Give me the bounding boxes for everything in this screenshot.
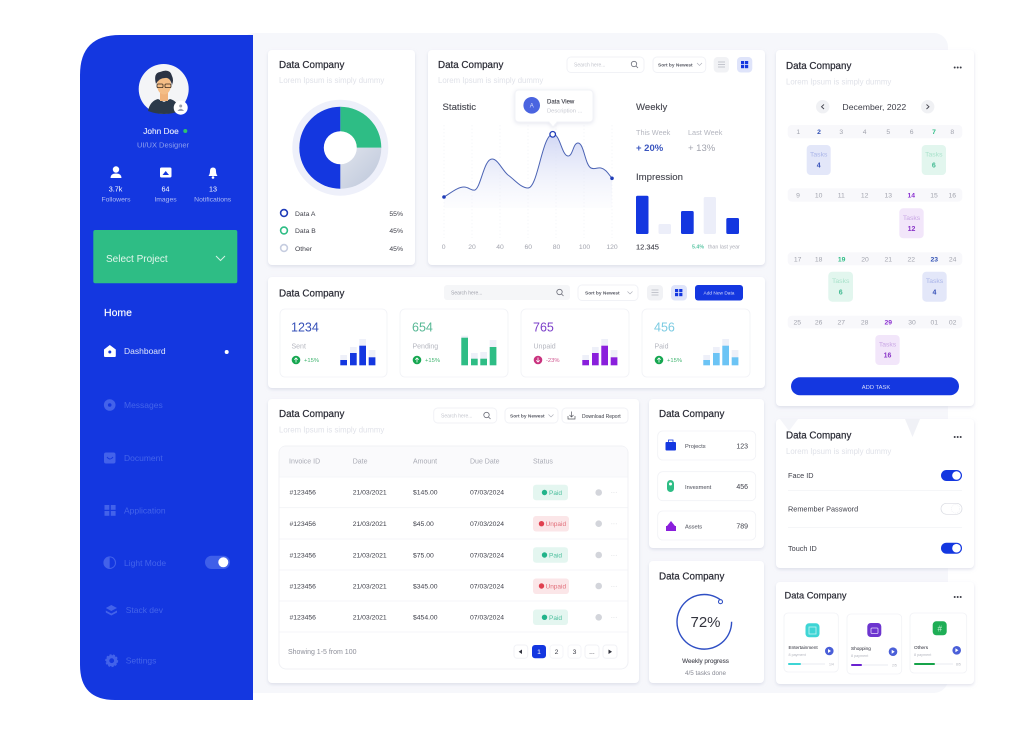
table header	[289, 458, 553, 466]
stat card: paid	[642, 309, 750, 377]
nav item: settings: Settings	[126, 656, 156, 666]
legend	[281, 210, 403, 253]
week 2: 14	[908, 192, 915, 199]
panel: weekly progress	[649, 561, 764, 683]
week 3: 18	[815, 256, 823, 263]
category: others	[910, 613, 967, 673]
search box: Search here...	[441, 414, 472, 420]
stat card: paid: +15%	[667, 358, 682, 364]
week 2: 12	[861, 192, 869, 199]
table header: Status	[533, 458, 553, 466]
tooltip: data view: Description ...	[547, 108, 583, 114]
week 1	[788, 125, 962, 138]
row 5	[290, 610, 617, 625]
stat card: paid: Paid	[654, 344, 669, 350]
main background panel	[240, 33, 948, 693]
task: blue 4: Tasks	[926, 278, 944, 285]
week 2: 16	[949, 192, 956, 199]
row 5: 07/03/2024	[470, 614, 504, 622]
week 3: 23	[931, 256, 938, 263]
week 1: 8	[950, 129, 954, 136]
heading: Data Company	[279, 409, 344, 420]
subtitle: Lorem Ipsum is simply dummy	[786, 447, 891, 456]
sort dropdown	[653, 57, 706, 72]
task: blue 4: 4	[933, 290, 937, 296]
investment row	[658, 472, 756, 501]
search box	[567, 57, 644, 72]
legend: 45%	[389, 246, 403, 253]
row 5: $454.00	[413, 614, 438, 622]
stat card: sent: Sent	[292, 344, 306, 350]
table footer text: Showing 1-5 from 100	[288, 649, 357, 656]
legend: Data B	[295, 228, 316, 235]
category: entertainment: 8 payment	[788, 653, 806, 657]
row 5: Paid	[549, 615, 562, 622]
task: green 6: 6	[839, 290, 843, 296]
line chart: 60	[525, 244, 532, 251]
impression change: than last year	[708, 244, 740, 250]
donut chart	[292, 100, 388, 196]
row 4: 07/03/2024	[470, 584, 504, 590]
line chart: 80	[553, 244, 560, 251]
statistic heading: Statistic	[442, 102, 476, 113]
bars: sent	[340, 339, 375, 365]
grid view button	[737, 57, 752, 72]
stat card: unpaid: 765	[533, 320, 554, 334]
stat: images: 64	[162, 184, 170, 194]
week 2: 15	[930, 192, 938, 199]
row 3: ···	[611, 552, 617, 559]
add new data button: Add New Data	[704, 290, 735, 296]
month navigation: December, 2022	[842, 102, 906, 112]
impression bar chart	[636, 196, 739, 234]
impression change	[692, 244, 740, 250]
heading: Data Company	[786, 61, 851, 72]
bars: pending	[461, 336, 496, 365]
panel: statistic	[428, 50, 765, 265]
legend: 55%	[389, 211, 403, 218]
task: purple 16: Tasks	[879, 342, 897, 348]
assets row	[658, 511, 756, 540]
row 4: ···	[611, 583, 617, 590]
panel: calendar	[776, 50, 974, 406]
week 3: 19	[838, 256, 846, 263]
list view button	[647, 285, 663, 300]
progress ring: 72%	[690, 614, 721, 631]
line chart: 40	[496, 244, 504, 251]
row 1	[290, 485, 617, 500]
week 1: 2	[817, 129, 821, 136]
week 3: 20	[861, 256, 869, 263]
row 3	[290, 547, 617, 563]
week 3: 22	[908, 256, 915, 263]
subtitle: Lorem Ipsum is simply dummy	[786, 78, 891, 86]
category: entertainment: Entertainment	[788, 645, 818, 650]
stat card: unpaid: -23%	[546, 358, 560, 364]
profile role: UI/UX Designer	[137, 140, 190, 150]
add task button	[791, 377, 959, 395]
row 4: $345.00	[413, 584, 438, 590]
table header: Due Date	[470, 458, 500, 466]
category: shopping	[847, 614, 902, 674]
notch shape right	[905, 419, 920, 437]
row 5: 21/03/2021	[353, 614, 387, 622]
progress caption: Weekly progress	[682, 658, 729, 665]
row 2: $45.00	[413, 521, 434, 528]
nav item: application	[104, 505, 166, 516]
row 2: 07/03/2024	[470, 521, 504, 528]
more menu	[954, 596, 962, 598]
panel: summary stats	[268, 277, 765, 388]
stat card: pending: 654	[412, 320, 433, 334]
legend: 45%	[389, 228, 403, 235]
nav item: stack dev: Stack dev	[126, 605, 164, 615]
sidebar	[80, 35, 253, 700]
heading: Data Company	[279, 60, 344, 71]
pagination: 3	[573, 649, 577, 656]
pagination: 2	[555, 649, 559, 656]
online status dot	[183, 129, 187, 133]
notch shape left	[780, 419, 798, 431]
task: green 6: Tasks	[832, 278, 850, 285]
week 4: 01	[931, 320, 938, 327]
stat card: sent: 1234	[291, 320, 319, 334]
row 4	[290, 578, 617, 594]
week 4: 25	[794, 320, 801, 327]
task: purple 12	[899, 208, 924, 238]
row 1: 21/03/2021	[353, 490, 387, 496]
stat card: pending	[400, 309, 508, 377]
week 2	[788, 188, 962, 202]
more menu	[954, 66, 962, 68]
nav item: document	[104, 452, 163, 464]
investment row: 456	[736, 484, 748, 491]
bars: paid	[703, 339, 738, 365]
row 2: #123456	[290, 521, 316, 528]
nav item: dashboard: Dashboard	[124, 346, 166, 356]
task: purple 16: 16	[884, 353, 891, 360]
row 3: Paid	[549, 552, 562, 560]
select project button	[93, 230, 237, 283]
week 4: 28	[861, 320, 869, 327]
task: blue 4: 4	[817, 162, 821, 170]
stat card: sent: +15%	[304, 358, 319, 364]
heading: Data Company	[786, 430, 851, 442]
investment row: Invesment	[685, 485, 712, 491]
week 2: 10	[815, 192, 823, 199]
task: purple 12: Tasks	[903, 215, 921, 222]
tooltip: data view	[515, 90, 593, 127]
line chart: 0	[442, 244, 446, 251]
download report button	[562, 408, 628, 423]
impression heading: Impression	[636, 172, 683, 183]
select project button: Select Project	[106, 254, 168, 265]
row 3: 21/03/2021	[353, 552, 387, 560]
week 1: 7	[932, 129, 936, 136]
week 3: 17	[794, 256, 802, 263]
add task button: ADD TASK	[862, 385, 890, 391]
sort dropdown: Sort by Newest	[585, 290, 620, 296]
panel: payment categories	[776, 582, 974, 684]
nav heading: Home	[104, 307, 132, 319]
week 4	[788, 316, 962, 328]
pagination: 1	[537, 649, 541, 656]
row 4: Unpaid	[546, 584, 566, 590]
legend: Data A	[295, 211, 316, 218]
nav item: settings	[106, 655, 156, 666]
week 4: 26	[815, 320, 823, 327]
task: purple 16	[875, 335, 900, 365]
week 1: 5	[886, 129, 890, 136]
week 2: 13	[885, 192, 892, 199]
row 4: 21/03/2021	[353, 584, 387, 590]
category: shopping: 2/5	[892, 664, 897, 668]
line chart: 120	[606, 244, 618, 251]
task: blue 4	[922, 272, 947, 302]
row 1: Paid	[549, 490, 562, 497]
weekly comparison: + 13%	[688, 143, 716, 154]
row 1: #123456	[290, 490, 316, 496]
task: green 6	[828, 272, 853, 302]
heading: Data Company	[438, 60, 503, 71]
invoice table	[279, 446, 628, 669]
stat card: sent	[280, 309, 387, 377]
stat card: unpaid: Unpaid	[534, 344, 556, 350]
line chart: 20	[468, 244, 476, 251]
heading: Data Company	[279, 288, 344, 300]
category: entertainment	[784, 613, 838, 672]
week 3: 24	[949, 256, 957, 263]
week 1: 6	[910, 129, 914, 136]
row 2	[290, 516, 617, 532]
list view button	[714, 57, 729, 72]
task: purple 12: 12	[908, 226, 915, 233]
row 5: ···	[611, 614, 617, 621]
table header: Date	[353, 458, 368, 466]
nav item: messages: Messages	[124, 400, 163, 410]
nav item: stack dev	[106, 605, 164, 616]
week 1: 3	[839, 129, 843, 136]
tooltip: data view: A	[530, 104, 534, 110]
search box: Search here...	[451, 290, 482, 296]
profile avatar	[139, 64, 189, 115]
nav item: light mode	[104, 556, 230, 569]
pagination: ...	[589, 649, 595, 656]
nav item: messages	[104, 399, 163, 411]
task: green 6: 6	[932, 162, 936, 170]
row 2: ···	[611, 520, 617, 528]
line chart	[442, 125, 618, 251]
month navigation	[816, 100, 934, 113]
stat card: paid: 456	[654, 320, 675, 334]
setting: face id: Face ID	[788, 471, 814, 480]
heading: Data Company	[784, 590, 847, 600]
task: blue 4: Tasks	[810, 152, 828, 158]
row 2: 21/03/2021	[353, 521, 387, 528]
impression change: 5.4%	[692, 244, 704, 250]
search box	[444, 285, 570, 300]
panel: donut chart	[268, 50, 415, 265]
line chart: 100	[579, 244, 590, 251]
row 1: 07/03/2024	[470, 490, 504, 496]
stat: notifications: 13	[209, 184, 217, 194]
pagination	[514, 645, 617, 658]
nav item: document: Document	[124, 453, 163, 463]
subtitle: Lorem Ipsum is simply dummy	[279, 426, 384, 434]
more menu	[954, 436, 962, 438]
category: others: Others	[914, 645, 929, 650]
heading: Data Company	[659, 572, 724, 582]
setting: remember password: Remember Password	[788, 504, 858, 514]
add new data button	[695, 285, 743, 300]
weekly heading: Weekly	[636, 102, 667, 113]
heading: Data Company	[659, 409, 724, 420]
week 4: 02	[949, 320, 957, 327]
category: others: 8 payment	[914, 653, 931, 657]
search box: Search here...	[574, 62, 605, 68]
grid view button	[671, 285, 687, 300]
nav item: application: Application	[124, 506, 166, 516]
week 3	[788, 252, 962, 265]
sort dropdown: Sort by Newest	[510, 414, 545, 420]
week 3: 21	[885, 256, 892, 263]
sort dropdown: Sort by Newest	[658, 62, 693, 68]
task: green 6	[922, 145, 946, 175]
row 3: #123456	[290, 552, 316, 560]
week 4: 27	[838, 320, 845, 327]
stat: images	[154, 168, 177, 204]
setting: remember password	[788, 503, 962, 514]
setting: touch id	[788, 543, 962, 554]
download report button: Download Report	[582, 414, 621, 420]
panel: invoice table	[268, 399, 639, 683]
subtitle: Lorem Ipsum is simply dummy	[438, 76, 543, 85]
impression total: 12.345	[636, 242, 659, 252]
table header: Amount	[413, 458, 437, 466]
stat: notifications	[194, 168, 232, 204]
task: blue 4	[807, 145, 831, 175]
legend: Other	[295, 246, 313, 253]
row 4: #123456	[290, 584, 316, 590]
stat: followers: Followers	[101, 196, 131, 204]
week 2: 11	[838, 192, 845, 199]
panel: counters	[649, 399, 764, 548]
nav item: light mode: Light Mode	[124, 558, 166, 568]
sort dropdown	[505, 408, 558, 423]
progress detail: 4/5 tasks done	[685, 670, 726, 677]
nav item: dashboard	[104, 345, 229, 357]
stat: followers	[101, 166, 131, 204]
category: shopping: Shopping	[851, 646, 871, 651]
projects row	[658, 431, 756, 460]
setting: touch id: Touch ID	[788, 544, 817, 553]
search box	[434, 408, 497, 423]
row 5: #123456	[290, 614, 316, 622]
row 3: 07/03/2024	[470, 552, 504, 560]
week 1: 4	[863, 129, 867, 136]
sort dropdown	[578, 285, 638, 300]
bars: unpaid	[582, 339, 617, 365]
row 2: Unpaid	[546, 521, 566, 528]
subtitle: Lorem Ipsum is simply dummy	[279, 76, 384, 85]
assets row: Assets	[685, 524, 702, 530]
setting: face id	[788, 470, 962, 481]
stat card: pending: Pending	[412, 344, 438, 350]
projects row: Projects	[685, 444, 706, 450]
row 3: $75.00	[413, 552, 434, 560]
stat card: pending: +15%	[425, 358, 440, 364]
stat: followers: 3.7k	[109, 184, 123, 194]
week 2: 9	[796, 192, 800, 199]
weekly comparison	[636, 128, 723, 154]
category: others: #	[937, 624, 942, 633]
row 1: $145.00	[413, 490, 438, 496]
weekly comparison: Last Week	[688, 128, 723, 137]
tooltip: data view: Data View	[547, 100, 575, 106]
week 4: 29	[885, 320, 892, 327]
week 1: 1	[796, 129, 800, 136]
stat: images: Images	[154, 196, 177, 204]
table header: Invoice ID	[289, 458, 320, 466]
projects row: 123	[736, 444, 748, 450]
panel: security settings	[776, 419, 974, 568]
profile name: John Doe	[143, 126, 179, 136]
weekly comparison: This Week	[636, 128, 671, 137]
category: shopping: 8 payment	[851, 654, 868, 658]
stat: notifications: Notifications	[194, 196, 232, 204]
row 1: ···	[611, 489, 617, 496]
weekly comparison: + 20%	[636, 143, 664, 154]
stat card: unpaid	[521, 309, 629, 377]
category: others: 8/5	[956, 662, 961, 666]
assets row: 789	[736, 524, 748, 530]
task: green 6: Tasks	[925, 152, 943, 158]
week 4: 30	[908, 320, 916, 327]
category: entertainment: 1/4	[829, 662, 834, 666]
